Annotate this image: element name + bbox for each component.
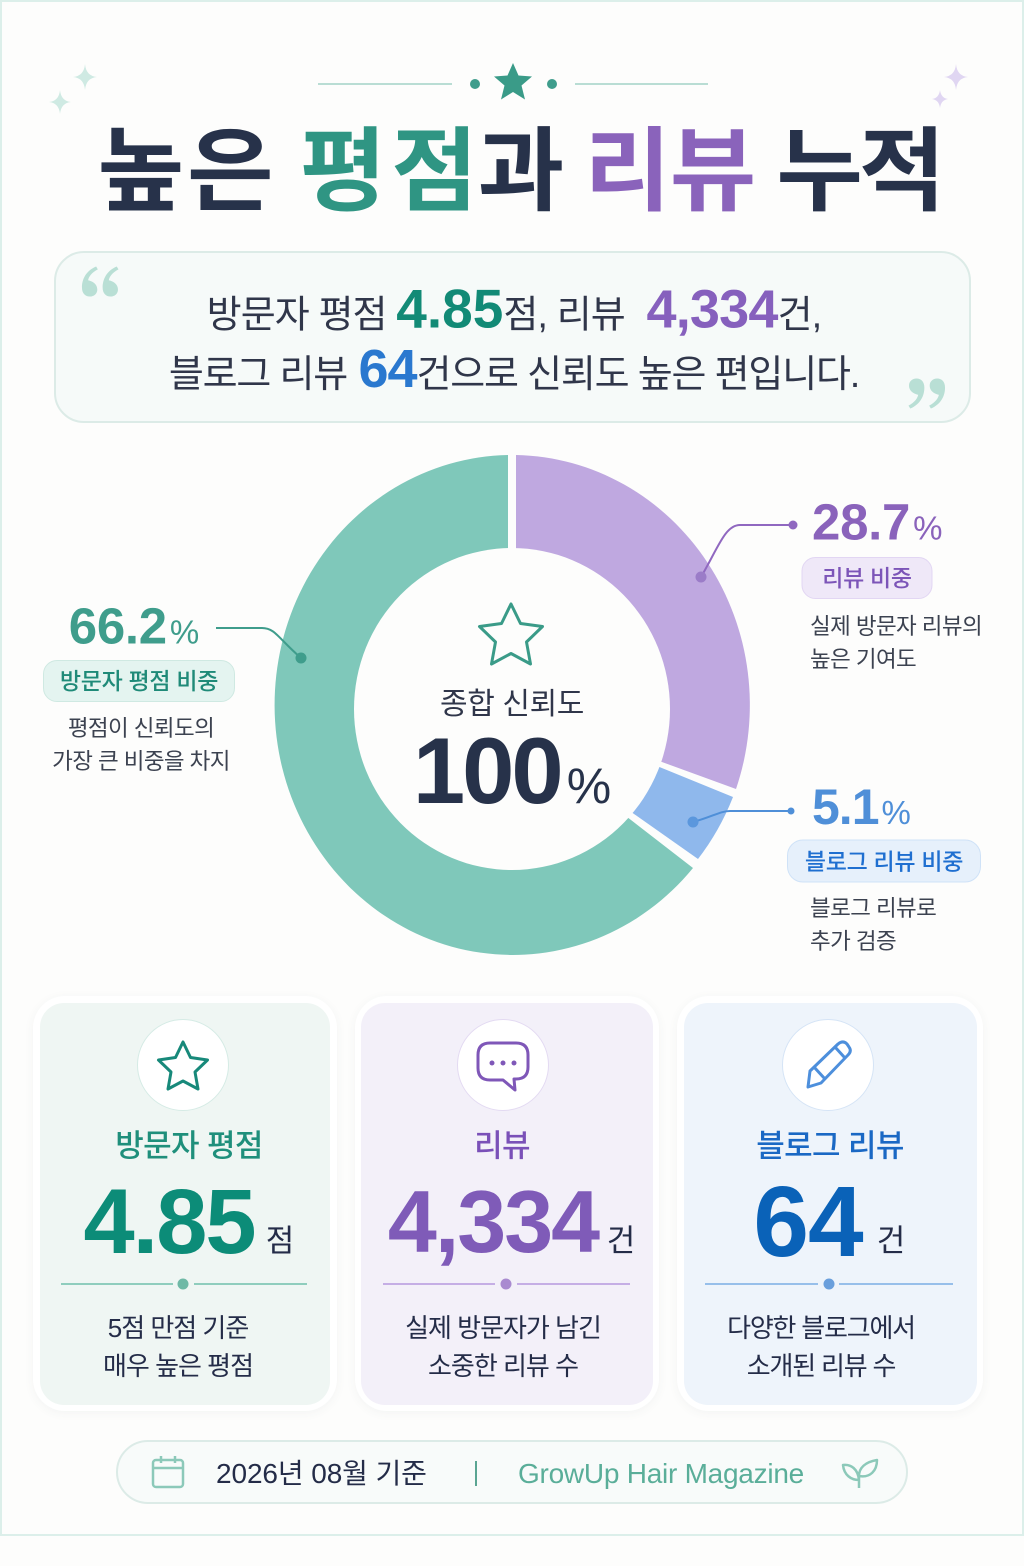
callout description: 블로그 리뷰로 — [810, 896, 936, 921]
callout: blog share — [787, 779, 981, 954]
callout value: 28.7% — [812, 494, 942, 550]
date text: 2026년 08월 기준 — [216, 1458, 427, 1489]
card description — [103, 1313, 253, 1381]
card: blog reviews — [677, 996, 983, 1411]
callout description: 실제 방문자 리뷰의 — [810, 614, 982, 639]
center label: 종합 신뢰도 — [440, 688, 584, 721]
card unit: 점 — [266, 1224, 294, 1258]
callout pill — [802, 557, 932, 599]
segment: visitor rating 66.2% — [275, 455, 693, 955]
card description: 실제 방문자가 남긴 — [405, 1313, 601, 1343]
card label: 블로그 리뷰 — [756, 1128, 904, 1164]
callout pill — [787, 840, 981, 882]
title: 높은 — [98, 121, 277, 222]
title: 과 — [478, 121, 563, 222]
card description: 소개된 리뷰 수 — [747, 1351, 895, 1381]
card divider — [61, 1278, 307, 1290]
card: visitor rating — [33, 996, 337, 1411]
callout description: 평점이 신뢰도의 — [68, 716, 214, 741]
card unit: 건 — [607, 1224, 635, 1258]
card description: 다양한 블로그에서 — [727, 1313, 915, 1343]
card description: 5점 만점 기준 — [108, 1313, 248, 1343]
callout pill: 리뷰 비중 — [822, 565, 912, 591]
icon: speech bubble — [457, 1019, 549, 1111]
callout description: 높은 기여도 — [810, 647, 916, 672]
card value: 64 — [753, 1166, 863, 1278]
connector lines — [216, 520, 798, 828]
segment: reviews 28.7% — [516, 455, 750, 789]
card value: 4,334 — [388, 1172, 598, 1271]
card background — [684, 1003, 977, 1405]
icon: star — [137, 1019, 229, 1111]
brand text: GrowUp Hair Magazine — [518, 1458, 804, 1489]
footer pill — [116, 1440, 908, 1504]
card label: 리뷰 — [474, 1128, 530, 1164]
callout description: 추가 검증 — [810, 929, 896, 954]
center value: 100% — [413, 718, 611, 823]
donut hole — [354, 548, 670, 870]
card divider — [383, 1278, 630, 1290]
icon: calendar — [152, 1456, 184, 1488]
callout description — [810, 896, 936, 954]
callout description: 가장 큰 비중을 차지 — [52, 749, 230, 774]
callout: visitor rating share — [43, 598, 235, 774]
card: reviews — [355, 996, 659, 1411]
segment: blog 5.1% — [617, 755, 733, 859]
center star icon — [478, 602, 544, 666]
icon: pencil — [782, 1019, 874, 1111]
card description — [727, 1313, 915, 1381]
card unit: 건 — [877, 1224, 905, 1258]
quote mark open: “ — [37, 244, 125, 370]
title: 리뷰 — [584, 121, 755, 222]
separator — [475, 1461, 477, 1486]
title — [98, 121, 941, 222]
donut chart — [274, 455, 750, 955]
callout description — [810, 614, 982, 672]
title: 누적 — [776, 121, 941, 222]
quote panel — [54, 251, 971, 423]
callout value: 5.1% — [812, 779, 911, 835]
quote text line 1: 방문자 평점 4.85점, 리뷰 4,334건, — [207, 278, 821, 340]
card description — [405, 1313, 601, 1381]
card label: 방문자 평점 — [115, 1128, 263, 1164]
card background — [361, 1003, 653, 1405]
card background — [40, 1003, 330, 1405]
card description: 매우 높은 평점 — [103, 1351, 253, 1381]
card description: 소중한 리뷰 수 — [428, 1351, 578, 1381]
card divider — [705, 1278, 953, 1290]
quote text line 2: 블로그 리뷰 64건으로 신뢰도 높은 편입니다. — [169, 339, 859, 399]
callout pill: 방문자 평점 비중 — [60, 668, 218, 694]
quote mark close: ” — [902, 356, 990, 482]
callout description — [52, 716, 230, 774]
icon: leaf sprout — [842, 1458, 878, 1488]
callout pill — [43, 660, 235, 702]
callout pill: 블로그 리뷰 비중 — [805, 848, 963, 874]
card value: 4.85 — [83, 1171, 255, 1273]
callout: review share — [802, 494, 982, 672]
callout value: 66.2% — [69, 598, 199, 654]
title: 평점 — [300, 121, 483, 222]
header ornament — [50, 63, 968, 114]
